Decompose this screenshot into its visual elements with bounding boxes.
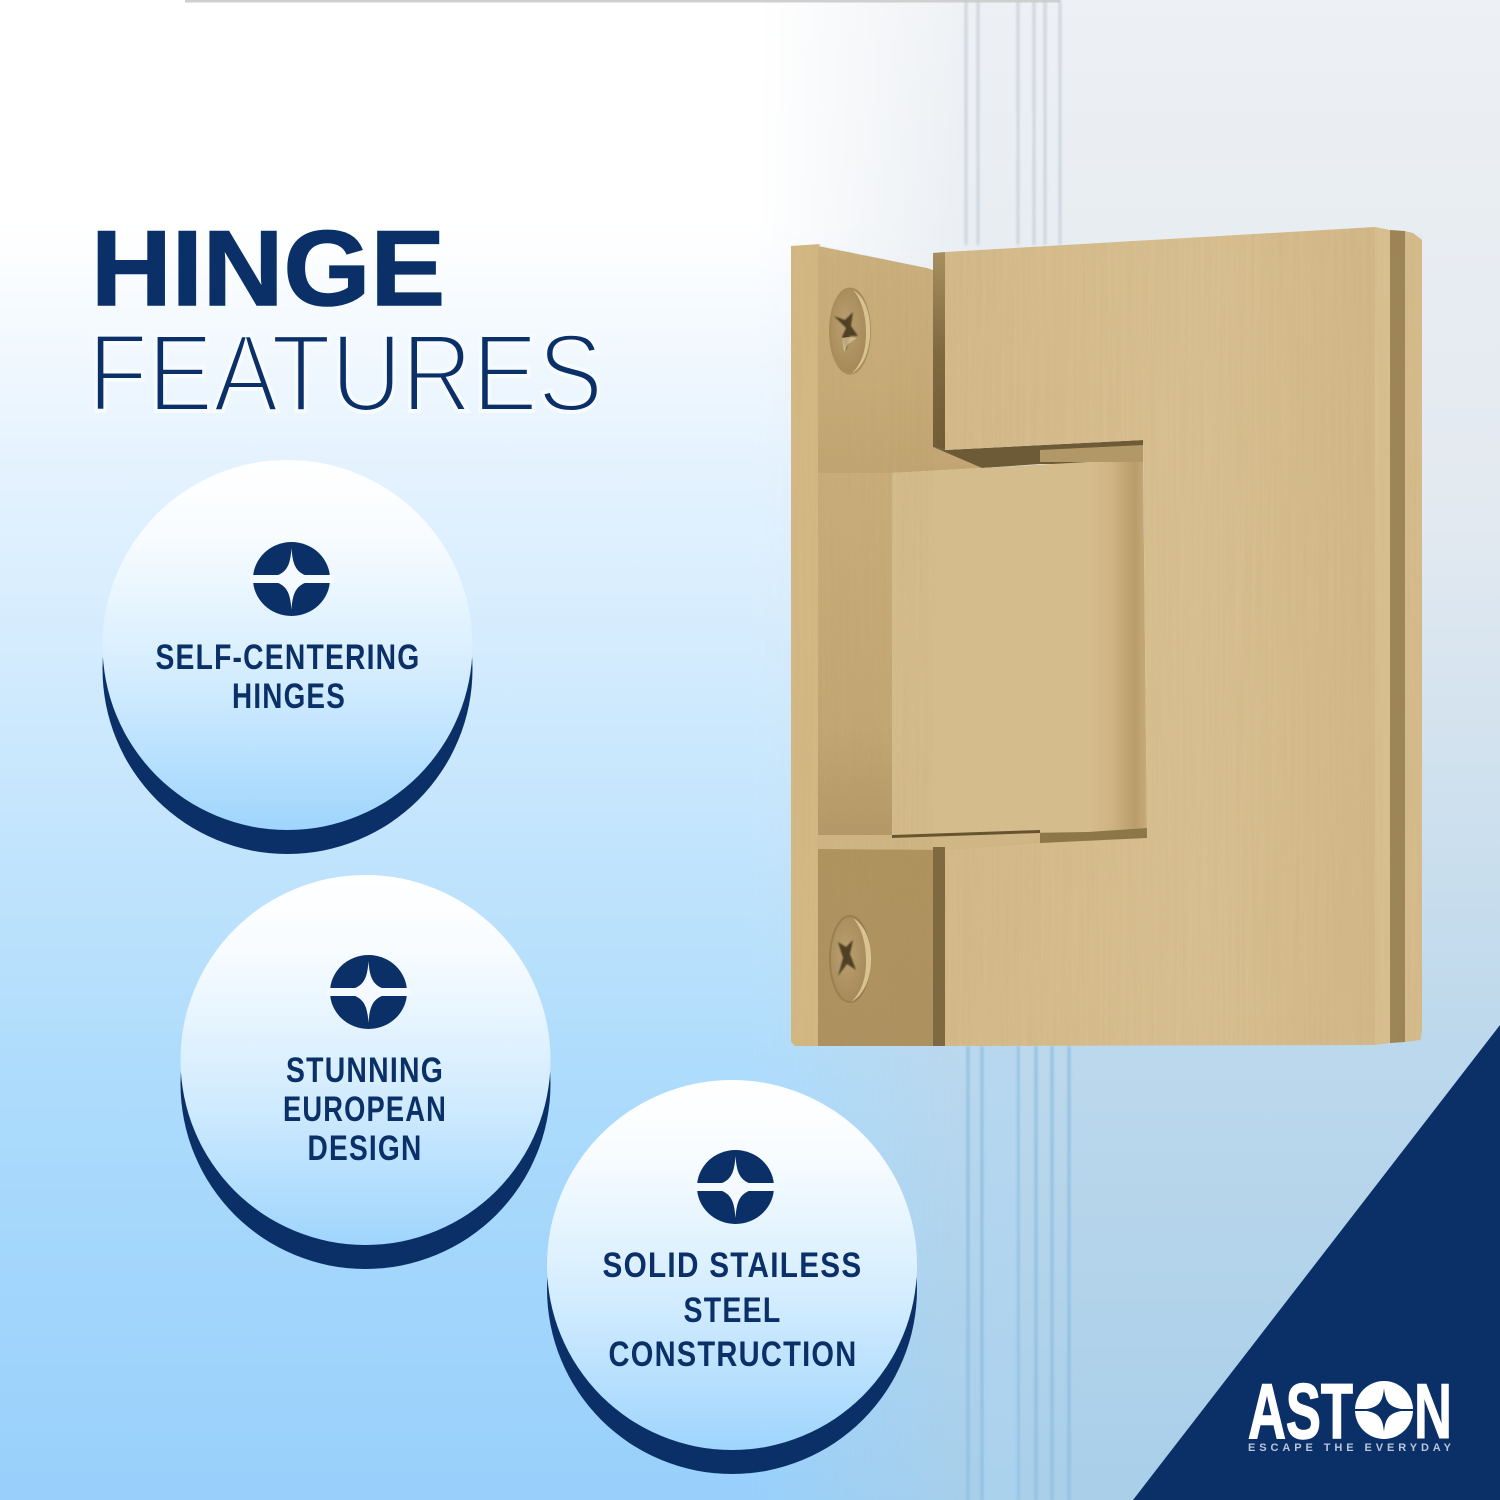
bottom screw — [830, 916, 871, 1002]
label: solid stailess steel construction: CONSTRUCTION — [608, 1335, 858, 1374]
feature card: stunning european design — [180, 875, 550, 1269]
logo: Aston: AST — [1248, 1367, 1353, 1455]
left wall plate — [791, 244, 1040, 1046]
hinge: brass hardware — [791, 227, 1422, 1047]
title: Hinge Features: HINGE — [91, 208, 445, 328]
label: self-centering hinges: SELF-CENTERING — [156, 638, 420, 677]
feature card: solid stainless steel construction — [547, 1080, 917, 1474]
brushed metal texture — [791, 227, 1422, 1047]
title: Hinge Features — [88, 208, 603, 435]
icon: star badge — [327, 955, 411, 1029]
label: solid stailess steel construction: STEEL — [684, 1291, 782, 1330]
logo: Aston: N — [1414, 1367, 1452, 1455]
label: self-centering hinges: HINGES — [232, 677, 346, 716]
title: Hinge Features: FEATURES — [88, 312, 603, 435]
logo: Aston: ESCAPE THE EVERYDAY — [1248, 1442, 1452, 1454]
top screw — [830, 288, 870, 374]
right main plate — [933, 227, 1422, 1046]
label: stunning european design: EUROPEAN — [283, 1090, 447, 1129]
feature card: self-centering hinges — [102, 460, 472, 854]
label: stunning european design: DESIGN — [308, 1129, 422, 1168]
icon: star badge — [250, 542, 334, 616]
corner triangle — [1133, 1025, 1500, 1500]
icon: logo star O — [1355, 1381, 1413, 1439]
label: stunning european design: STUNNING — [286, 1051, 444, 1090]
icon: star badge — [694, 1150, 778, 1224]
label: solid stailess steel construction: SOLID STAILESS — [602, 1246, 862, 1285]
pivot block — [892, 440, 1149, 843]
